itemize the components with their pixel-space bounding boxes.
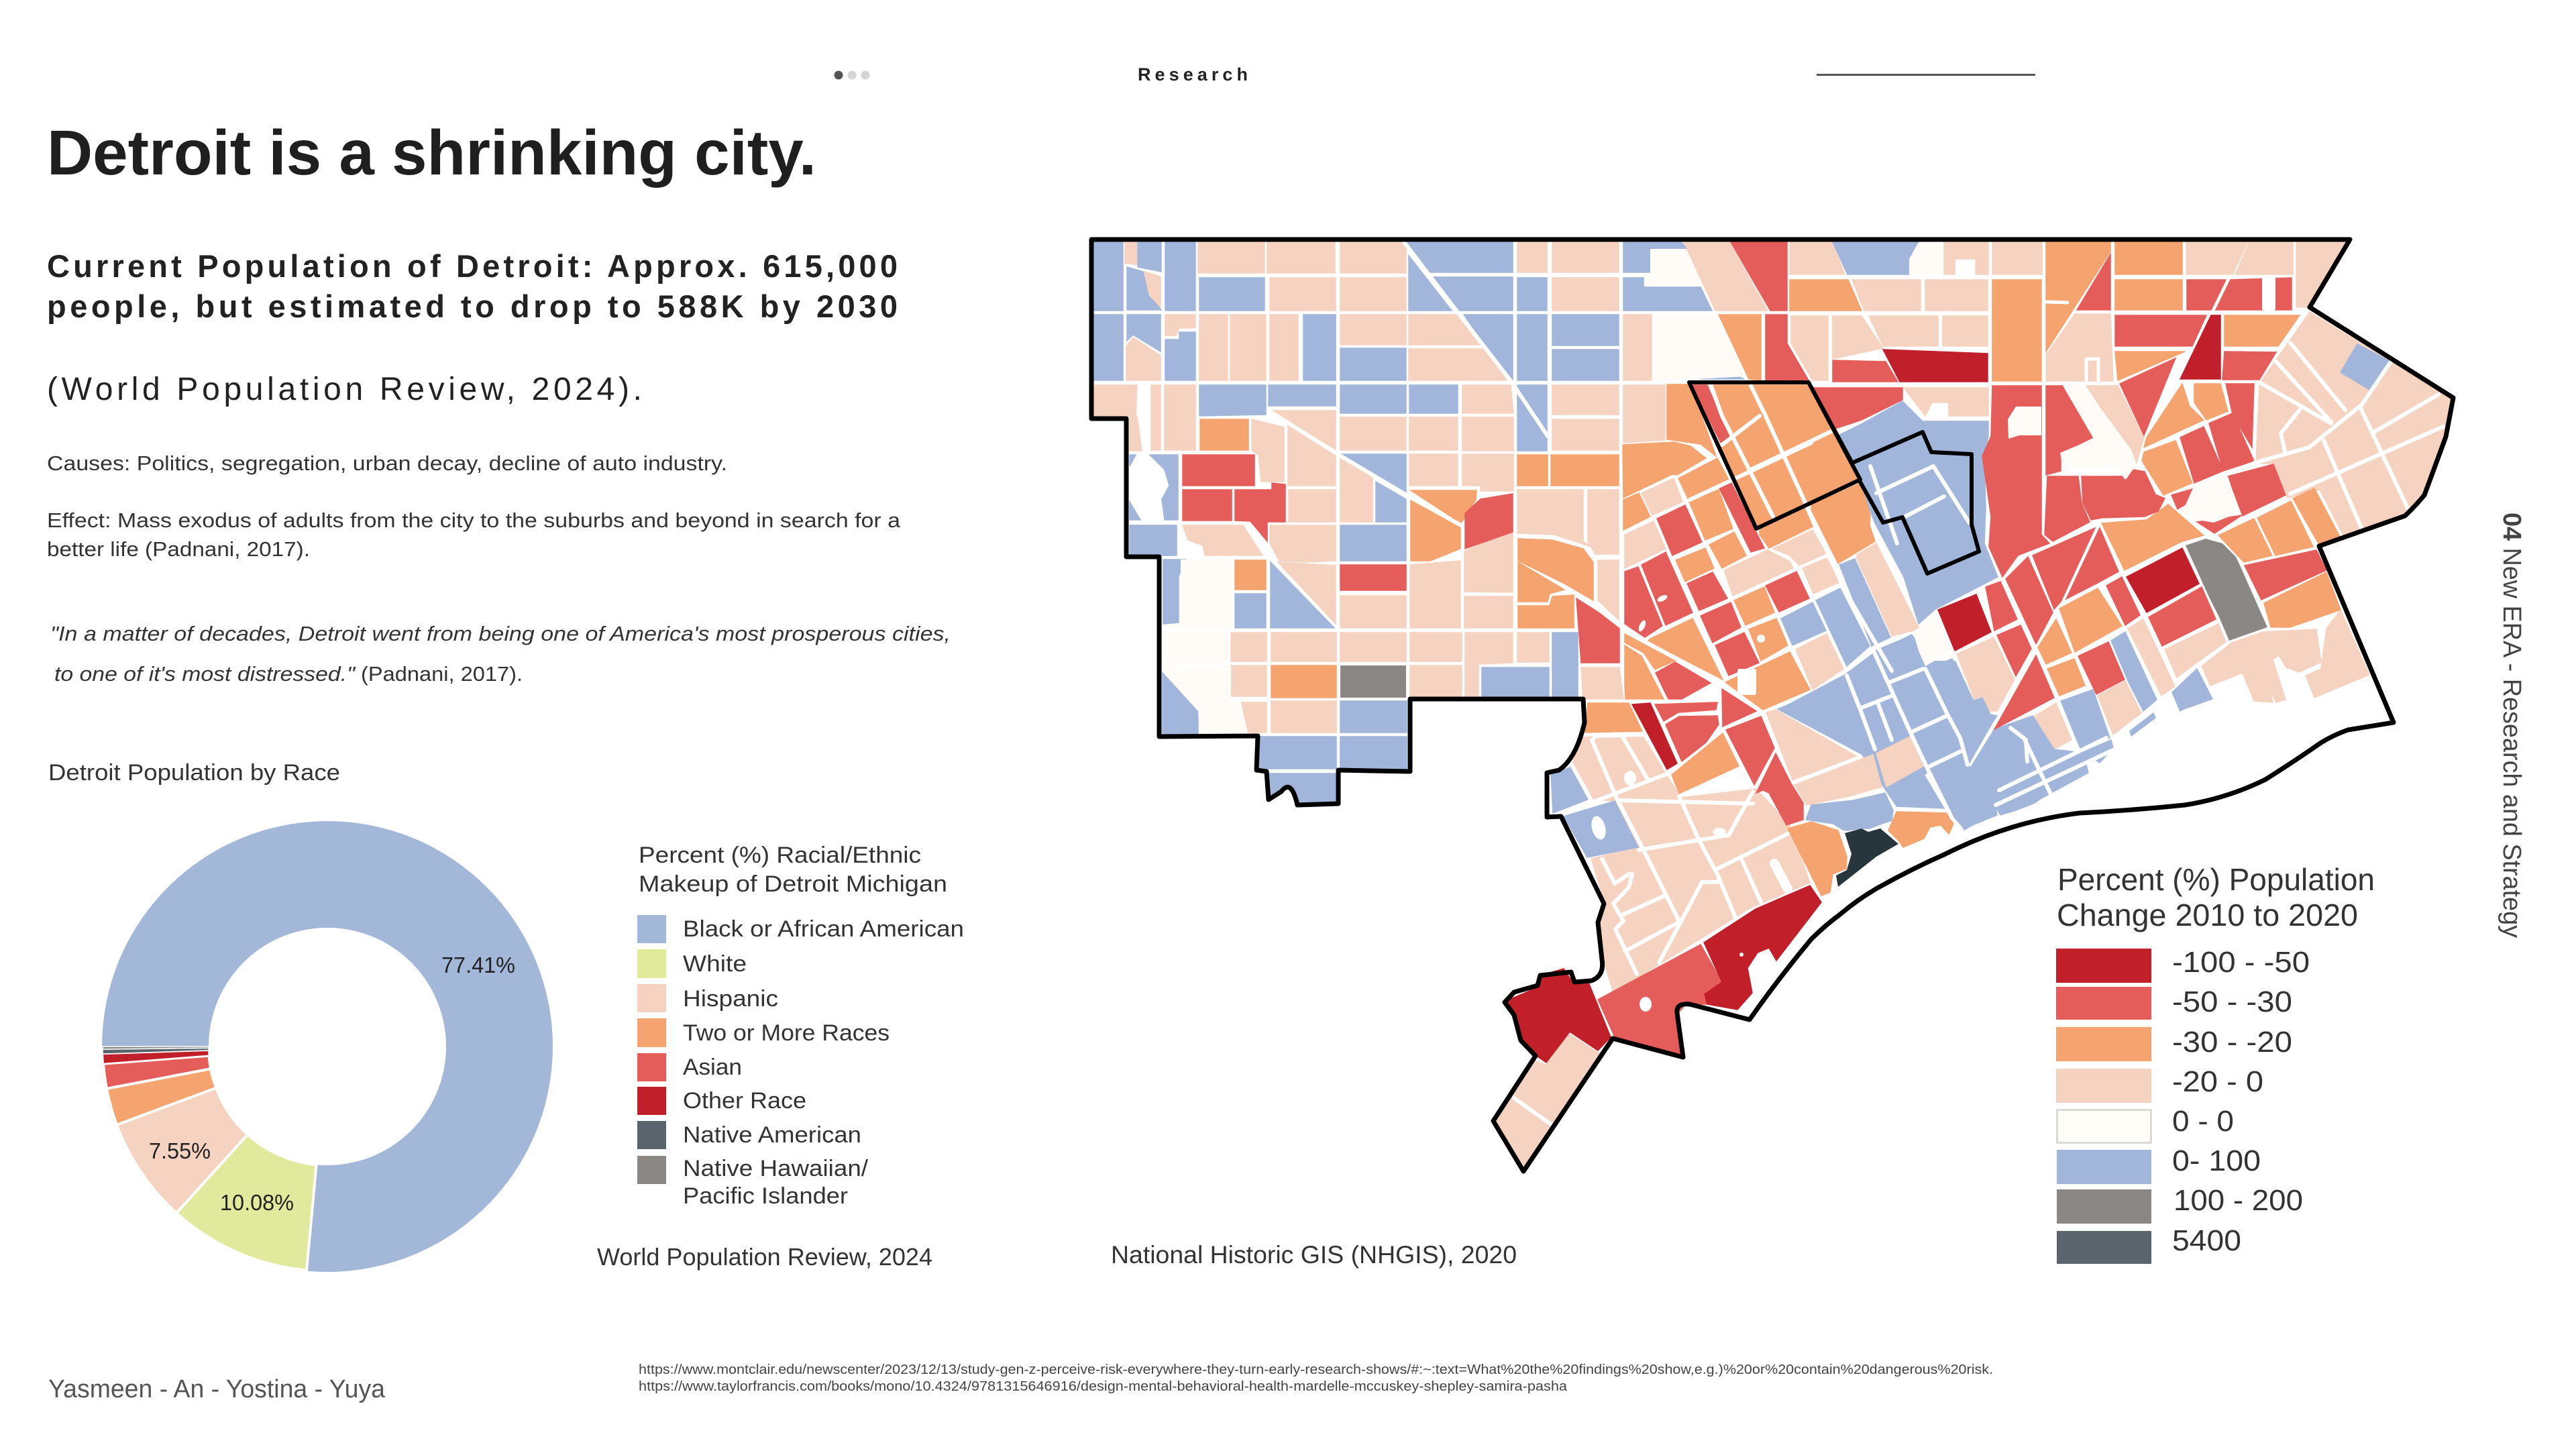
population change legend: 0- 100 xyxy=(2172,1144,2261,1177)
race legend: Native American xyxy=(683,1122,861,1148)
reference links: https://www.montclair.edu/newscenter/2023/12/13/study-gen-z-perceive-risk-everywhere-they-turn-early-research-shows/#:~:text=What%20the%20findings%20show,e.g.)%20or%20contain%20dangerous%20risk. xyxy=(639,1362,1993,1377)
population change legend: 5400 xyxy=(2172,1224,2241,1257)
city boundary xyxy=(1091,239,2453,1171)
race legend: Asian xyxy=(683,1055,742,1080)
race legend: Two or More Races xyxy=(683,1020,890,1046)
race legend xyxy=(637,843,964,1209)
side label: 04 New ERA - Research and Strategy xyxy=(2498,513,2526,938)
donut value labels: 7.55% xyxy=(149,1138,211,1163)
causes text: Causes: Politics, segregation, urban decay, decline of auto industry. xyxy=(47,451,727,475)
map: population change by census tract xyxy=(1091,239,2453,1171)
population change legend: -30 - -20 xyxy=(2172,1026,2292,1059)
donut value labels: 10.08% xyxy=(220,1190,294,1215)
inner district outline xyxy=(1689,382,1979,574)
donut chart heading: Detroit Population by Race xyxy=(48,760,340,786)
map holes xyxy=(1589,594,1765,1012)
population change legend: -50 - -30 xyxy=(2172,985,2292,1018)
tracts: -20 to 0 xyxy=(1093,239,2452,1171)
race legend: Native Hawaiian/ xyxy=(683,1156,869,1181)
source: World Population Review: (World Population Review, 2024). xyxy=(47,372,642,407)
population change legend: 100 - 200 xyxy=(2174,1184,2303,1217)
map source: National Historic GIS (NHGIS), 2020 xyxy=(1111,1241,1517,1269)
donut value labels: 77.41% xyxy=(441,953,515,977)
title: Detroit is a shrinking city. xyxy=(47,117,816,189)
tracts: -30 to -20 xyxy=(1200,242,2341,896)
subheading: current population: Current Population of Detroit: Approx. 615,000 xyxy=(47,248,898,284)
tracts: 0 to 100 xyxy=(1093,242,2391,857)
quote xyxy=(50,622,951,686)
subheading: current population: people, but estimated to drop to 588K by 2030 xyxy=(47,288,898,324)
effect text: better life (Padnani, 2017). xyxy=(47,537,310,561)
donut chart: population by race xyxy=(102,821,553,1272)
reference links xyxy=(639,1362,1993,1394)
tract: 5400 xyxy=(1836,828,1898,887)
race legend: Black or African American xyxy=(683,916,964,942)
tracts: 0 - 0 xyxy=(1163,242,2240,733)
quote: to one of it's most distressed." xyxy=(54,662,356,686)
population change legend: -100 - -50 xyxy=(2172,946,2310,979)
tracts: 100 to 200 xyxy=(1340,539,2267,698)
donut value labels xyxy=(149,953,515,1215)
tracts: -50 to -30 xyxy=(1183,242,2326,1056)
page progress dots xyxy=(835,71,869,79)
header rule xyxy=(1817,74,2035,76)
population change legend: Percent (%) Population xyxy=(2057,862,2375,897)
population change legend: 0 - 0 xyxy=(2172,1105,2234,1138)
quote: "In a matter of decades, Detroit went from being one of America's most prosperous cities, xyxy=(50,622,951,645)
tracts: -100 to -50 xyxy=(1506,315,2220,1063)
effect text: Effect: Mass exodus of adults from the city to the suburbs and beyond in search for a xyxy=(47,508,901,532)
population change legend xyxy=(2056,862,2375,1264)
race legend: Makeup of Detroit Michigan xyxy=(639,871,947,897)
population change legend: Change 2010 to 2020 xyxy=(2057,898,2358,932)
underlay: blue neighbourhood xyxy=(1778,634,1997,830)
authors: Yasmeen - An - Yostina - Yuya xyxy=(48,1375,386,1403)
subheading: current population xyxy=(47,248,898,324)
population change legend: -20 - 0 xyxy=(2172,1065,2263,1098)
race chart source: World Population Review, 2024 xyxy=(597,1243,932,1271)
streets xyxy=(1269,242,2443,1126)
race legend: White xyxy=(683,951,747,977)
race legend: Other Race xyxy=(683,1088,806,1114)
quote: (Padnani, 2017). xyxy=(361,662,523,686)
reference links: https://www.taylorfrancis.com/books/mono/10.4324/9781315646916/design-mental-behavioral-health-mardelle-mccuskey-shepley-samira-pasha xyxy=(639,1379,1568,1394)
race legend: Pacific Islander xyxy=(683,1183,848,1209)
race legend: Percent (%) Racial/Ethnic xyxy=(639,843,921,868)
section label: Research: Research xyxy=(1138,64,1248,85)
race legend: Hispanic xyxy=(683,986,778,1012)
effect text xyxy=(47,508,901,561)
